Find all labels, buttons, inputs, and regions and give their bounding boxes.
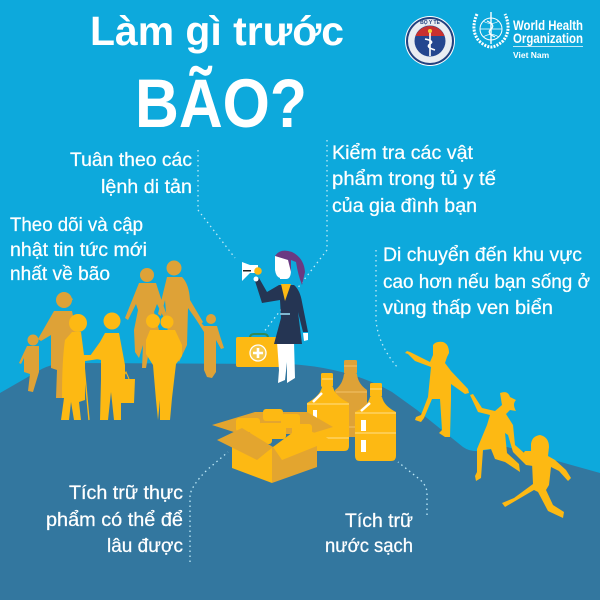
first aid kit — [236, 334, 281, 367]
text: follow news — [10, 214, 147, 285]
silhouette: man walking — [158, 260, 203, 362]
text: store food: lâu được — [107, 535, 183, 557]
jug left — [307, 373, 349, 451]
text: store clean water: nước sạch — [325, 535, 413, 557]
text: store food — [46, 482, 183, 557]
silhouette: old man with cap — [38, 292, 77, 398]
silhouette: child right — [192, 313, 224, 378]
text: check medical kit: phẩm trong tủ y tế — [332, 168, 496, 190]
legs — [277, 342, 295, 383]
logo: world health organization — [474, 12, 583, 60]
belt — [280, 313, 290, 315]
scarf — [281, 284, 291, 301]
text: follow news: nhật tin tức mới — [10, 239, 147, 261]
text: store clean water — [325, 510, 413, 557]
box front — [232, 445, 272, 483]
title: BÃO? — [135, 65, 307, 142]
text: move to higher ground — [383, 244, 590, 319]
silhouette: man with bag — [90, 312, 135, 420]
evacuating family, front group — [61, 312, 182, 420]
text: follow news: nhất về bão — [10, 263, 110, 285]
ground hill — [0, 363, 600, 600]
text: move to higher ground: cao hơn nếu bạn sống ở — [383, 271, 590, 293]
cardboard box of food — [212, 409, 333, 483]
silhouette: woman middle — [470, 392, 533, 481]
text: evacuation orders: lệnh di tản — [101, 176, 192, 198]
text: evacuation orders — [70, 149, 192, 198]
hair — [275, 251, 305, 285]
jug right — [355, 383, 396, 461]
text: check medical kit: của gia đình bạn — [332, 195, 477, 217]
right hand — [303, 333, 308, 341]
silhouette: hiker top — [405, 342, 469, 437]
text: move to higher ground: Di chuyển đến khu vực — [383, 244, 582, 266]
text: check medical kit: Kiểm tra các vật — [332, 142, 474, 164]
silhouette: small child left — [19, 334, 39, 392]
cans — [236, 409, 312, 444]
text: check medical kit — [332, 142, 496, 217]
text: move to higher ground: vùng thấp ven biển — [383, 297, 553, 319]
silhouette: elderly woman with cane — [61, 314, 99, 420]
evacuating family, far group — [19, 260, 224, 398]
logo: ministry of health — [405, 16, 455, 66]
logo: world health organization: Organization — [513, 31, 583, 46]
box back flaps — [212, 412, 333, 434]
front flaps — [217, 428, 273, 460]
text: store clean water: Tích trữ — [345, 510, 413, 532]
silhouette: adult carrying child — [146, 314, 182, 420]
head — [275, 256, 291, 279]
hikers climbing hill — [405, 342, 571, 518]
woman with megaphone — [242, 251, 308, 383]
megaphone — [242, 262, 258, 281]
dress — [255, 278, 308, 344]
text: evacuation orders: Tuân theo các — [70, 149, 192, 171]
logo: world health organization: World Health — [513, 18, 583, 33]
logo: world health organization: Viet Nam — [513, 50, 550, 60]
logo: ministry of health: BỘ Y TẾ — [420, 18, 441, 26]
water jugs — [307, 360, 396, 461]
dotted leaders — [190, 140, 427, 562]
title — [90, 8, 344, 142]
silhouette: child bottom — [502, 435, 571, 518]
silhouette: woman walking — [125, 268, 168, 368]
title: Làm gì trước — [90, 8, 344, 54]
text: follow news: Theo dõi và cập — [10, 214, 143, 236]
text: store food: phẩm có thể để — [46, 509, 183, 531]
jug back — [335, 360, 367, 437]
text: store food: Tích trữ thực — [69, 482, 183, 504]
